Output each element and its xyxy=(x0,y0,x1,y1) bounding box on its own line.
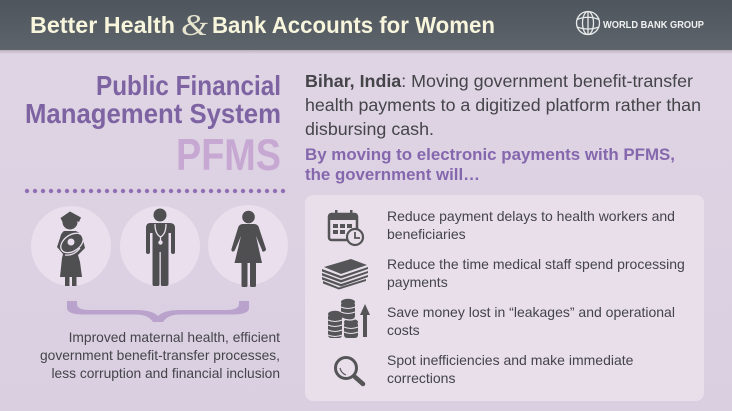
icon: stack of paper xyxy=(322,259,368,290)
item: reduce payment delays: beneficiaries xyxy=(387,226,466,242)
subheading: By moving to electronic payments with PFMS, xyxy=(305,145,675,164)
icon: calendar and clock xyxy=(329,210,363,245)
item: save money xyxy=(328,299,675,338)
title: & xyxy=(181,7,208,42)
item: reduce processing time: payments xyxy=(387,274,448,290)
title xyxy=(30,7,495,42)
item: reduce payment delays xyxy=(329,208,675,245)
item: spot inefficiencies xyxy=(336,352,634,386)
item: reduce processing time xyxy=(322,256,685,290)
outcome text: Improved maternal health, efficient xyxy=(69,330,280,345)
title: Bank Accounts for Women xyxy=(212,12,495,38)
intro text: Bihar, India: disbursing cash. xyxy=(305,119,434,139)
item: save money: Save money lost in “leakages” and operational xyxy=(387,304,675,320)
heading: Public Financial Management System: Public Financial xyxy=(96,70,281,101)
heading: Public Financial Management System: Management System xyxy=(25,98,281,129)
title: Better Health xyxy=(30,12,175,38)
item: reduce payment delays: Reduce payment delays to health workers and xyxy=(387,208,675,224)
subheading xyxy=(305,145,675,184)
item: spot inefficiencies: corrections xyxy=(387,370,455,386)
intro text: Bihar, India xyxy=(305,71,701,139)
logo: World Bank Group xyxy=(576,12,704,34)
subheading: the government will… xyxy=(305,165,480,184)
circle: woman xyxy=(208,205,288,287)
item: save money: costs xyxy=(387,322,420,338)
outcome text: government benefit-transfer processes, xyxy=(40,348,280,363)
brace xyxy=(67,301,249,322)
logo: World Bank Group: WORLD BANK GROUP xyxy=(603,19,704,31)
panel: benefits list xyxy=(305,195,704,401)
dotted divider xyxy=(27,189,285,193)
icon: coin stacks with arrow xyxy=(328,299,370,338)
item: spot inefficiencies: Spot inefficiencies and make immediate xyxy=(387,352,634,368)
heading: PFMS: PFMS xyxy=(176,131,281,180)
heading: Public Financial Management System xyxy=(25,70,281,129)
outcome text xyxy=(40,330,280,381)
circle: nurse with baby xyxy=(31,206,111,286)
icon: magnifying glass xyxy=(336,358,363,384)
intro text: Bihar, India: health payments to a digitized platform rather than xyxy=(305,95,701,115)
intro text: Bihar, India: Bihar, India: Moving government benefit-transfer xyxy=(305,71,693,91)
item: reduce processing time: Reduce the time medical staff spend processing xyxy=(387,256,685,272)
outcome text: less corruption and financial inclusion xyxy=(51,366,280,381)
circle: doctor with stethoscope xyxy=(120,206,200,286)
header bar xyxy=(0,0,732,50)
